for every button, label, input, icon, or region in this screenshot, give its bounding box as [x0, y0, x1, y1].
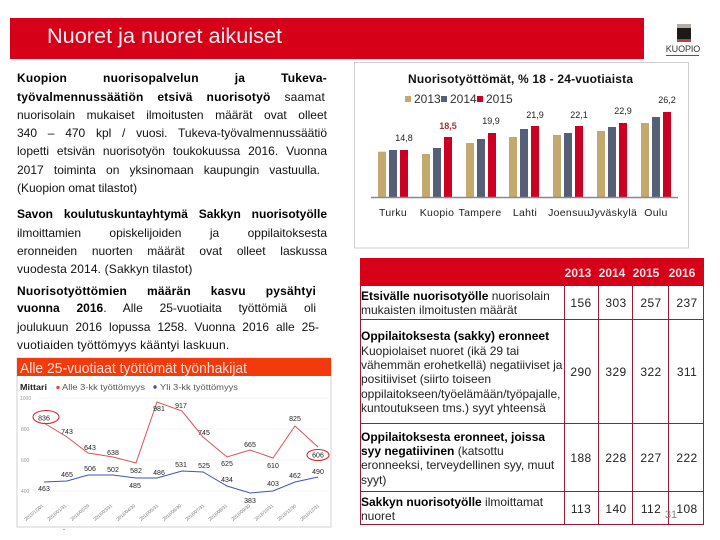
date axis labels: 2016/06/30	[161, 503, 183, 522]
data labels: 917	[175, 403, 187, 410]
table header row	[360, 258, 704, 286]
category labels: Joensuu	[548, 207, 590, 219]
category labels: Kuopio	[420, 207, 454, 219]
data labels	[38, 403, 324, 505]
date axis labels: 2016/02/29	[69, 503, 91, 522]
category labels: Tampere	[459, 207, 501, 219]
data table	[360, 258, 704, 525]
data labels: 490	[312, 469, 324, 476]
table row: etsivä: 303	[605, 296, 627, 310]
table row: eronneet negatiivinen: Oppilaitoksesta eronneet, joissa	[361, 430, 545, 444]
data labels: 825	[289, 416, 301, 423]
highlight circles	[33, 410, 329, 460]
table row: eronneet negatiivinen: 228	[605, 451, 627, 465]
table row: eronneet negatiivinen: 222	[676, 451, 698, 465]
text block: etsivä nuorisotyö	[17, 71, 328, 195]
data labels: 403	[267, 481, 279, 488]
table row: eronneet negatiivinen	[361, 430, 698, 487]
text block: nuorisotyöttömyys	[16, 284, 319, 352]
value labels: 18,5	[439, 121, 457, 131]
category labels: Jyväskylä	[589, 207, 637, 219]
line chart: alle 25-vuotiaat työttömät työnhakijat: 600	[21, 458, 30, 464]
data labels: 485	[129, 483, 141, 490]
data labels: 486	[153, 470, 165, 477]
data labels: 638	[107, 450, 119, 457]
title: Nuoret ja nuoret aikuiset	[47, 23, 282, 48]
value labels: 26,2	[658, 95, 676, 105]
table row: eronneet negatiivinen: syyt)	[361, 473, 386, 487]
data labels: 610	[267, 463, 279, 470]
data labels: 462	[289, 473, 301, 480]
table row: oppilaitoksesta eronneet: Kuopiolaiset nuoret (ikä 29 tai	[361, 344, 519, 358]
data labels: 665	[244, 442, 256, 449]
table row: Sakkyn ilmoittamat: 108	[676, 502, 698, 516]
table row: oppilaitoksesta eronneet: oppilaitokseen/työelämään/työpajalle,	[361, 387, 560, 401]
chart legend: Mittari	[20, 383, 47, 392]
table row: oppilaitoksesta eronneet: 290	[570, 365, 592, 379]
data labels: 463	[38, 486, 50, 493]
data labels: 643	[84, 445, 96, 452]
table row: Sakkyn ilmoittamat: Sakkyn nuorisotyölle ilmoittamat	[361, 495, 543, 509]
category labels	[379, 207, 668, 219]
table row: Sakkyn ilmoittamat	[361, 495, 698, 523]
table row: Sakkyn ilmoittamat: 113	[571, 502, 591, 516]
date axis labels: 2016/04/30	[115, 503, 137, 522]
data labels: 625	[221, 461, 233, 468]
table row: etsivä	[361, 289, 698, 317]
text block: Sakky	[17, 207, 328, 276]
line chart: alle 25-vuotiaat työttömät työnhakijat: 1000	[20, 396, 31, 402]
data labels: 743	[61, 429, 73, 436]
data labels: 525	[198, 463, 210, 470]
chart header	[17, 358, 331, 377]
data labels: 502	[107, 467, 119, 474]
table row: etsivä: mukaisten ilmoitusten määrät	[361, 303, 517, 317]
chart legend: Alle 3-kk työttömyys	[62, 383, 145, 392]
text block: etsivä nuorisotyö: 2017 toiminta on yksinomaan kaupungin vastuulla.	[17, 163, 320, 177]
text block: etsivä nuorisotyö: Kuopion nuorisopalvelun ja Tukeva-	[17, 71, 327, 85]
text block: nuorisotyöttömyys: vuonna 2016. Alle 25-vuotiaita työttömiä oli	[17, 301, 316, 315]
table row: Sakkyn ilmoittamat: nuoret	[361, 509, 395, 523]
table row: oppilaitoksesta eronneet: 322	[640, 365, 662, 379]
text block: etsivä nuorisotyö: (Kuopion omat tilastot)	[17, 181, 137, 195]
data table: 2016	[669, 266, 695, 280]
table row: oppilaitoksesta eronneet	[361, 329, 697, 415]
category labels: Oulu	[644, 207, 668, 219]
table row: eronneet negatiivinen: 188	[570, 451, 592, 465]
date axis labels: 2015/12/01	[23, 503, 45, 522]
table row: oppilaitoksesta eronneet: positiiviset (siirto toiseen	[361, 372, 491, 386]
table row: etsivä: 257	[640, 296, 662, 310]
date axis labels: 2016/09/30	[230, 503, 252, 522]
text block: nuorisotyöttömyys: Nuorisotyöttömien määrän kasvu pysähtyi	[17, 284, 316, 298]
table row: oppilaitoksesta eronneet: 329	[605, 365, 627, 379]
icon: Kuopio logo: KUOPIO	[666, 44, 700, 54]
date axis labels: 2016/10/31	[253, 503, 275, 522]
date axis labels: 2016/12/31	[299, 503, 321, 522]
value labels: 22,9	[614, 106, 632, 116]
data labels: 434	[221, 477, 233, 484]
table row: eronneet negatiivinen: syy negatiivinen (katsottu	[361, 444, 504, 458]
table row: eronneet negatiivinen: 227	[640, 451, 662, 465]
text block: etsivä nuorisotyö: työvalmennussäätiön etsivä nuorisotyö saamat	[17, 90, 325, 104]
date axis labels	[23, 503, 321, 522]
data labels: 745	[198, 430, 210, 437]
text block: Sakky: vuodesta 2014. (Sakkyn tilastot)	[17, 262, 193, 276]
line chart: alle 25-vuotiaat työttömät työnhakijat: 400	[21, 489, 30, 495]
date axis labels: 2016/08/31	[207, 503, 229, 522]
data labels: 582	[130, 468, 142, 475]
title banner	[10, 18, 644, 59]
table row: Sakkyn ilmoittamat: 112	[641, 502, 661, 516]
date axis labels: 2016/03/31	[92, 503, 114, 522]
date axis labels: 2016/05/31	[138, 503, 160, 522]
value labels	[395, 95, 676, 143]
table row: etsivä: Etsivälle nuorisotyölle nuorisolain	[361, 289, 550, 303]
data labels: 383	[244, 498, 256, 505]
table row: Sakkyn ilmoittamat: 140	[605, 502, 627, 516]
data labels: 981	[153, 406, 165, 413]
text block: Sakky: Savon koulutuskuntayhtymä Sakkyn nuorisotyölle	[17, 207, 327, 221]
table row: etsivä: 237	[676, 296, 698, 310]
text block: nuorisotyöttömyys: joulukuun 2016 lopussa 1258. Vuonna 2016 alle 25-	[17, 320, 319, 334]
data labels: 506	[84, 466, 96, 473]
data table: 2014	[599, 266, 625, 280]
data table: 2015	[633, 266, 659, 280]
table row: oppilaitoksesta eronneet: Oppilaitoksesta (sakky) eronneet	[361, 329, 549, 343]
text block: Sakky: eronneiden nuorten määrät ovat olleet laskussa	[17, 244, 327, 258]
text block: etsivä nuorisotyö: nuorisolain mukaiset ilmoitusten määrät ovat olleet	[17, 108, 327, 122]
text block: etsivä nuorisotyö: lopetti etsivän nuorisotyön toukokuussa 2016. Vuonna	[17, 144, 327, 158]
axis	[371, 196, 678, 198]
date axis labels: 2016/11/30	[276, 503, 297, 522]
table row: oppilaitoksesta eronneet: kuntoutukseen tms.) syyt yhteensä	[361, 401, 546, 415]
data labels: 531	[175, 462, 187, 469]
value labels: 22,1	[570, 110, 588, 120]
chart legend	[20, 383, 238, 392]
text block: etsivä nuorisotyö: 340 – 470 kpl / vuosi. Tukeva-työvalmennussäätiö	[17, 126, 327, 140]
chart legend: 2013	[414, 92, 441, 106]
chart legend: Yli 3-kk työttömyys	[160, 383, 238, 392]
line chart: alle 25-vuotiaat työttömät työnhakijat: 800	[21, 427, 30, 433]
chart title: Nuorisotyöttömät, % 18 - 24-vuotiaista	[408, 72, 633, 86]
date axis labels: 2016/07/31	[184, 503, 206, 522]
bars	[378, 123, 649, 197]
red line: alle 3-kk	[44, 402, 318, 463]
table row: etsivä: 156	[570, 296, 592, 310]
chart legend: 2014	[450, 92, 477, 106]
text block: Sakky: ilmoittamien opiskelijoiden ja oppilaitoksesta	[17, 226, 327, 240]
table row: eronneet negatiivinen: eronneeksi, terveydellinen syy, muut	[361, 458, 554, 472]
chart legend	[405, 92, 513, 106]
category labels: Lahti	[513, 207, 537, 219]
page number: 31	[665, 509, 677, 521]
table row: oppilaitoksesta eronneet: vähemmän erohetkellä) negatiiviset ja	[361, 358, 562, 372]
data table: 2013	[565, 266, 591, 280]
value labels: 14,8	[395, 133, 413, 143]
text block: nuorisotyöttömyys: vuotiaiden työttömyys kääntyi laskuun.	[17, 338, 229, 352]
chart header: Alle 25-vuotiaat työttömät työnhakijat	[20, 360, 248, 377]
value labels: 21,9	[526, 110, 544, 120]
table row: oppilaitoksesta eronneet: 311	[677, 365, 697, 379]
value labels: 19,9	[482, 116, 500, 126]
blue line: yli 3-kk	[44, 471, 318, 493]
data labels: 465	[61, 472, 73, 479]
data labels: 836	[38, 416, 50, 422]
data labels: 606	[312, 452, 324, 460]
category labels: Turku	[379, 207, 407, 219]
date axis labels: 2016/01/31	[46, 503, 68, 522]
chart legend: 2015	[486, 92, 513, 106]
icon: Kuopio logo	[662, 20, 704, 60]
